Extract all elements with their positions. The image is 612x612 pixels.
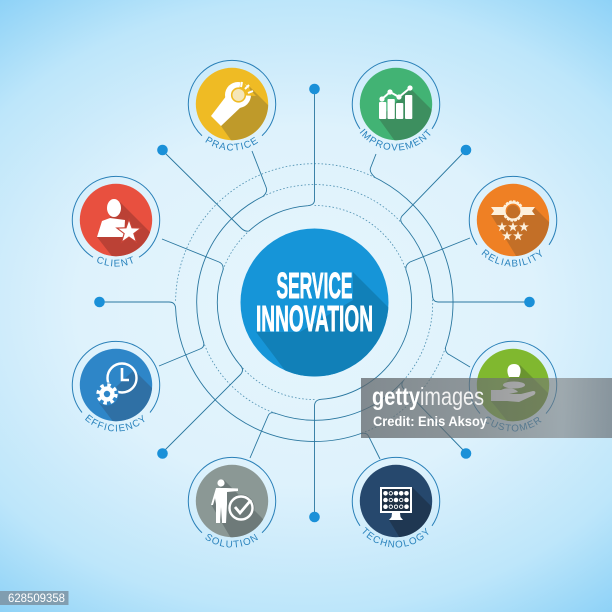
badge: solution	[188, 456, 276, 548]
badge: reliability	[468, 176, 558, 267]
badge: solution: SOLUTION	[206, 534, 258, 548]
connector network	[99, 89, 529, 517]
badge: practice	[188, 60, 276, 151]
badge: technology: TECHNOLOGY	[362, 526, 428, 548]
badge: practice: PRACTICE	[205, 136, 258, 151]
badge: efficiency: EFFICIENCY	[85, 414, 144, 432]
center circle: service innovation: INNOVATION	[256, 298, 373, 339]
watermark: getty images credit	[361, 378, 612, 438]
badge: client	[72, 176, 160, 267]
watermark: getty images credit: getty	[372, 383, 420, 411]
badge: efficiency	[72, 340, 160, 432]
watermark: getty images credit: Credit: Enis Aksoy	[373, 413, 487, 429]
badge: improvement: IMPROVEMENT	[360, 128, 430, 150]
badge: reliability: RELIABILITY	[482, 249, 542, 267]
badge: customer	[468, 340, 558, 432]
center circle: service innovation: SERVICE	[276, 265, 352, 306]
badge: improvement	[352, 60, 440, 150]
node dots	[94, 84, 535, 522]
badge: client: CLIENT	[97, 256, 133, 267]
badge: technology	[352, 456, 440, 548]
image id tag: 628509358	[8, 593, 65, 605]
badge: customer: CUSTOMER	[484, 416, 542, 432]
center circle: service innovation	[240, 228, 388, 376]
watermark: getty images credit: images	[420, 383, 484, 411]
